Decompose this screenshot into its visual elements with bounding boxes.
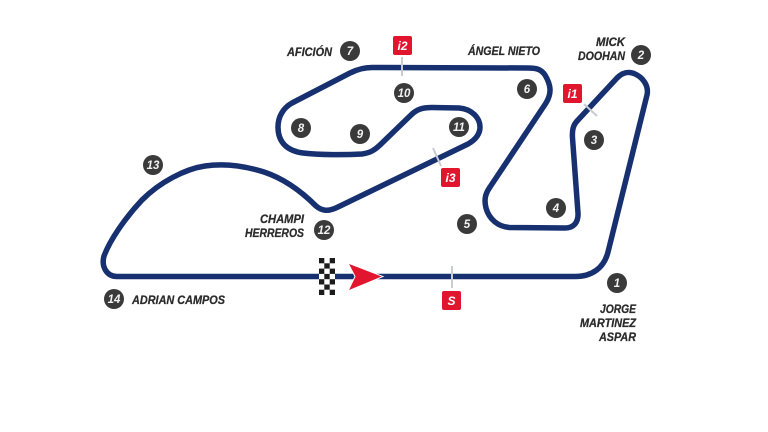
sector marker: i1 <box>563 84 582 103</box>
label: Mick Doohan: MICK <box>596 37 626 49</box>
turn 10 <box>394 83 414 103</box>
label: Afición: AFICIÓN <box>286 46 333 59</box>
label: Champi Herreros <box>245 214 305 240</box>
turn 8 <box>291 118 311 138</box>
turn 9 <box>350 124 370 144</box>
checkered flag <box>319 258 335 295</box>
label: Jorge Martinez Aspar: JORGE <box>600 304 636 316</box>
track outline <box>103 68 647 276</box>
turn 7: 7 <box>347 46 354 58</box>
label: Champi Herreros: CHAMPI <box>260 214 305 226</box>
label: Mick Doohan <box>578 37 626 63</box>
sector marker: i1: i1 <box>567 87 578 101</box>
turn 10: 10 <box>398 88 411 100</box>
turn 2 <box>631 45 651 65</box>
turn 14: 14 <box>108 294 121 306</box>
turn 12 <box>314 220 334 240</box>
sector line: i2 <box>401 57 403 76</box>
turn 1: 1 <box>614 278 620 290</box>
turn 3 <box>584 130 604 150</box>
sector marker: i2 <box>393 36 412 55</box>
turn 8: 8 <box>298 123 305 135</box>
turn 9: 9 <box>357 129 364 141</box>
sector marker: S: S <box>447 294 456 308</box>
turn 12: 12 <box>318 225 331 237</box>
label: Adrian Campos: ADRIAN CAMPOS <box>131 295 225 307</box>
turn 13 <box>143 155 163 175</box>
turn 3: 3 <box>591 135 598 147</box>
turn 11 <box>449 117 469 137</box>
label: Jorge Martinez Aspar: MARTINEZ <box>580 318 637 330</box>
sector line: i1 <box>584 104 597 116</box>
sector marker: i3 <box>441 168 460 187</box>
turn 5 <box>457 214 477 234</box>
label: Jorge Martinez Aspar: ASPAR <box>598 332 637 344</box>
turn 4 <box>546 198 566 218</box>
turn 1 <box>607 273 627 293</box>
sector line: S <box>451 266 453 288</box>
turn 7 <box>340 41 360 61</box>
turn 5: 5 <box>464 219 471 231</box>
start direction arrow <box>348 263 383 291</box>
turn 13: 13 <box>147 160 160 172</box>
turn 11: 11 <box>453 122 465 134</box>
sector line: i3 <box>433 148 441 166</box>
label: Ángel Nieto: ÁNGEL NIETO <box>467 45 540 58</box>
turn 2: 2 <box>637 50 645 62</box>
turn 6: 6 <box>524 84 531 96</box>
sector marker: i3: i3 <box>445 171 456 185</box>
sector marker: i2: i2 <box>397 39 408 53</box>
label: Champi Herreros: HERREROS <box>245 228 304 240</box>
sector marker: S <box>442 291 461 310</box>
turn 4: 4 <box>552 203 560 215</box>
turn 14 <box>104 289 124 309</box>
label: Mick Doohan: DOOHAN <box>578 51 626 63</box>
label: Jorge Martinez Aspar <box>580 304 637 344</box>
turn 6 <box>517 79 537 99</box>
